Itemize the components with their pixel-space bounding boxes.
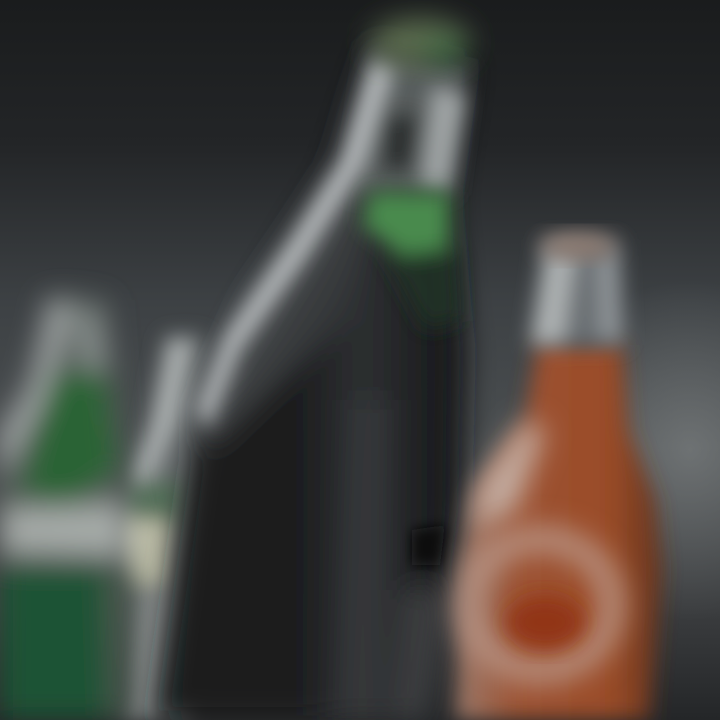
dark clasp [412, 525, 445, 565]
bottle: large central dark bottle [155, 18, 472, 720]
label ring [468, 539, 612, 671]
body [455, 345, 662, 720]
bottle: orange right bottle [455, 232, 662, 720]
neck and shoulder highlight [196, 60, 465, 430]
shoulder highlight [470, 420, 545, 530]
body [155, 40, 472, 720]
rim [540, 232, 616, 260]
label centre [507, 596, 583, 648]
glass neck [350, 45, 470, 195]
green cap [370, 18, 470, 66]
bottle: green left bottle [0, 295, 135, 720]
green band [362, 192, 462, 330]
bottle: small pale rear bottle [115, 335, 205, 720]
glass neck [530, 240, 624, 345]
